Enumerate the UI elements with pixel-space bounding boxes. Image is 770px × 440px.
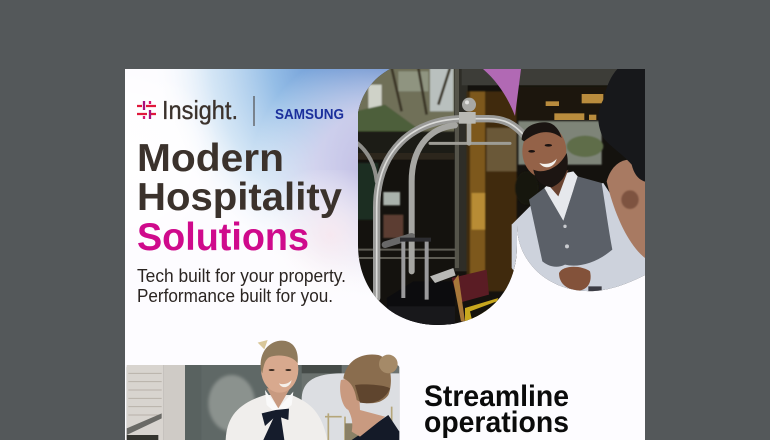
title: Solutions [137, 216, 309, 259]
staff member from behind [340, 354, 399, 440]
ceiling lights [546, 94, 603, 120]
lower photo: hotel staff talking [127, 340, 399, 440]
infographic canvas [125, 69, 645, 440]
staff member smiling [226, 340, 327, 440]
photo background [127, 365, 399, 440]
vest [529, 176, 612, 267]
luggage [387, 240, 498, 326]
Insight wordmark: Insight. [162, 95, 238, 125]
section heading: Streamline [424, 380, 569, 413]
title [137, 137, 342, 259]
subtitle text: Tech built for your property. [137, 266, 346, 286]
towel stack [128, 373, 162, 415]
chrome cart frame [355, 119, 525, 298]
hands [559, 267, 591, 291]
foreground guest head [598, 69, 645, 258]
bellman [511, 122, 645, 292]
window with trees [355, 68, 455, 238]
beard [533, 153, 568, 187]
subtitle text: Performance built for you. [137, 286, 333, 306]
section heading [424, 380, 569, 439]
title: Modern [137, 137, 284, 180]
entry frame [454, 68, 468, 271]
shirt [511, 183, 645, 291]
hero photo: bellman with luggage cart [355, 68, 650, 333]
white equipment [302, 373, 399, 440]
logo: Samsung: SAMSUNG [275, 107, 344, 123]
subtitle text [137, 266, 346, 306]
brass door [467, 86, 608, 291]
document panel [125, 69, 645, 440]
head [522, 132, 566, 176]
neck [550, 170, 568, 196]
logo: Insight [137, 95, 238, 125]
icon: Insight mark [137, 101, 156, 119]
collar [544, 171, 578, 221]
accent: pink wedge [483, 69, 521, 116]
title: Hospitality [137, 176, 342, 219]
logo divider [254, 96, 255, 126]
smile [539, 159, 557, 167]
section heading: operations [424, 406, 569, 439]
hair [522, 122, 562, 141]
